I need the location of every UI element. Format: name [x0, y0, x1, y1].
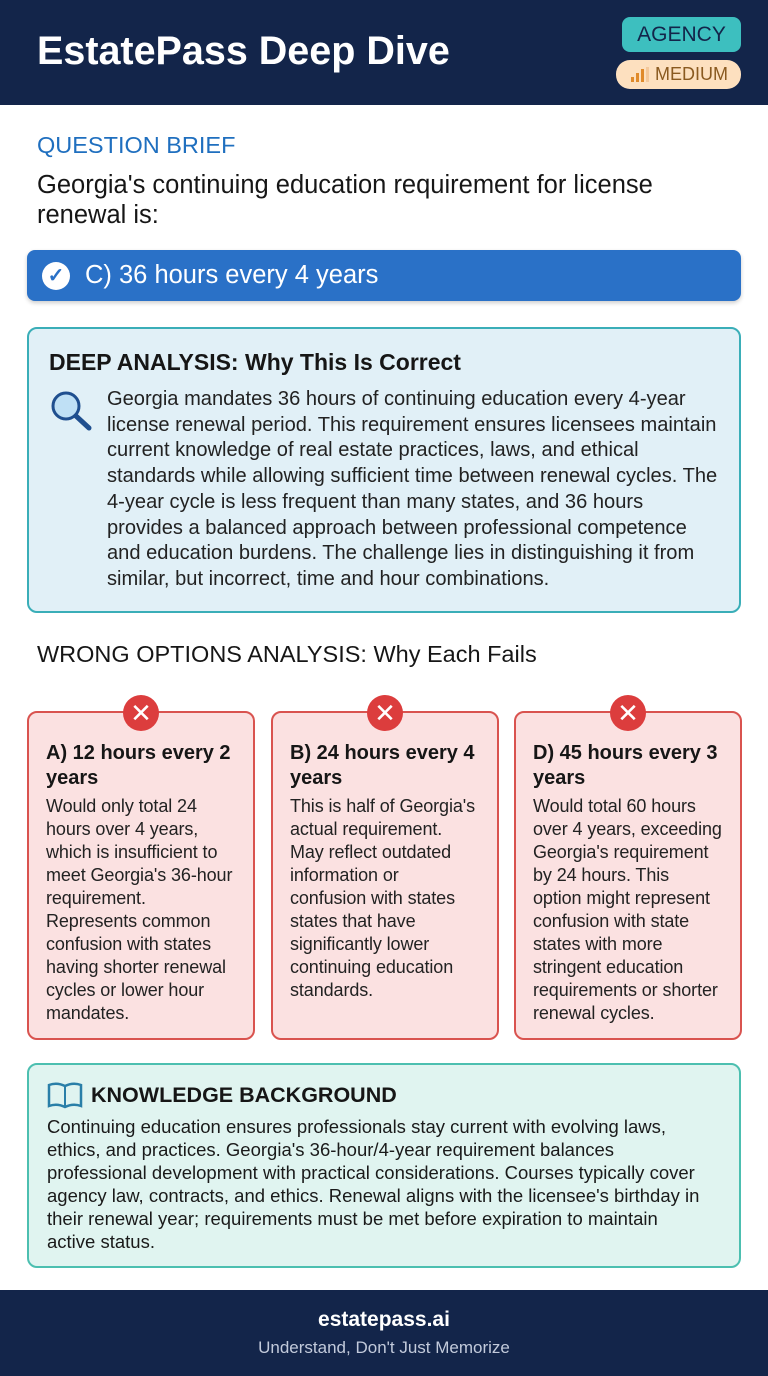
- card: option D: over 4 years, exceeding: [533, 819, 722, 839]
- knowledge text: Continuing education ensures professionals stay current with evolving laws,: [47, 1116, 666, 1137]
- card: option D: states with more: [533, 934, 662, 954]
- card: option A: Would only total 24: [46, 796, 197, 816]
- question text: Georgia's continuing education requirement for license: [37, 171, 653, 199]
- answer bar: [27, 250, 741, 301]
- card: option D: option might represent: [533, 888, 710, 908]
- card: option B: ✕: [374, 698, 396, 728]
- card: option D: D) 45 hours every 3: [533, 742, 718, 764]
- analysis text: current knowledge of real estate practices, laws, and ethical: [107, 439, 639, 461]
- card: option D: years: [533, 767, 585, 789]
- knowledge text: ethics, and practices. Georgia's 36-hour/4-year requirement balances: [47, 1139, 614, 1160]
- icon: book: [48, 1082, 82, 1108]
- card: option D: ✕: [617, 698, 639, 728]
- header: [0, 0, 768, 105]
- card: option A: confusion with states: [46, 934, 211, 954]
- card: option B: states that have: [290, 911, 415, 931]
- card: option A: cycles or lower hour: [46, 980, 204, 1000]
- card: option A: hours over 4 years,: [46, 819, 198, 839]
- card: option A: Represents common: [46, 911, 210, 931]
- badge: agency: [622, 17, 741, 52]
- heading: KNOWLEDGE BACKGROUND: [91, 1083, 397, 1107]
- card: option B: B) 24 hours every 4: [290, 742, 475, 764]
- heading: DEEP ANALYSIS: Why This Is Correct: [49, 349, 461, 375]
- card: option B: [271, 711, 499, 1040]
- card: option A: mandates.: [46, 1003, 129, 1023]
- badge: medium: [616, 60, 741, 89]
- title: EstatePass Deep Dive: [37, 29, 450, 73]
- knowledge text: agency law, contracts, and ethics. Renewal aligns with the licensee's birthday in: [47, 1185, 699, 1206]
- card: option A: A) 12 hours every 2: [46, 742, 231, 764]
- analysis text: Georgia mandates 36 hours of continuing education every 4-year: [107, 388, 686, 410]
- card: option B: confusion with states: [290, 888, 455, 908]
- card: option B: standards.: [290, 980, 373, 1000]
- analysis text: 4-year cycle is less frequent than many states, and 36 hours: [107, 491, 643, 513]
- card: option B: actual requirement.: [290, 819, 442, 839]
- card: option A: requirement.: [46, 888, 146, 908]
- footer: [0, 1290, 768, 1376]
- card: option B: significantly lower: [290, 934, 429, 954]
- footer site: estatepass.ai: [318, 1308, 450, 1331]
- card: option B: continuing education: [290, 957, 453, 977]
- card: option D: [514, 711, 742, 1040]
- icon: check: [42, 262, 70, 290]
- question text: renewal is:: [37, 201, 159, 229]
- answer text: C) 36 hours every 4 years: [85, 261, 378, 289]
- analysis text: similar, but incorrect, time and hour combinations.: [107, 568, 549, 590]
- card: option A: years: [46, 767, 98, 789]
- panel: knowledge background: [27, 1063, 741, 1268]
- card: option A: which is insufficient to: [46, 842, 217, 862]
- icon: magnifier: [52, 392, 92, 430]
- badge: medium: MEDIUM: [655, 64, 728, 84]
- section heading: wrong options: WRONG OPTIONS ANALYSIS: Why Each Fails: [37, 641, 537, 667]
- analysis text: [107, 388, 717, 590]
- card: option D: requirements or shorter: [533, 980, 718, 1000]
- analysis text: and education burdens. The challenge lies in distinguishing it from: [107, 542, 694, 564]
- card: option B: years: [290, 767, 342, 789]
- card: option D: by 24 hours. This: [533, 865, 669, 885]
- card: option B: May reflect outdated: [290, 842, 451, 862]
- knowledge text: active status.: [47, 1231, 155, 1252]
- question text: [37, 171, 653, 229]
- card: option A: ✕: [130, 698, 152, 728]
- card: option A: meet Georgia's 36-hour: [46, 865, 232, 885]
- panel: deep analysis: [27, 327, 741, 613]
- footer tagline: Understand, Don't Just Memorize: [258, 1338, 510, 1357]
- card: option D: stringent education: [533, 957, 683, 977]
- card: option A: having shorter renewal: [46, 957, 226, 977]
- knowledge text: professional development with practical considerations. Courses typically cover: [47, 1162, 695, 1183]
- card: option D: renewal cycles.: [533, 1003, 655, 1023]
- card: option B: This is half of Georgia's: [290, 796, 475, 816]
- knowledge text: [47, 1116, 699, 1252]
- section heading: question brief: QUESTION BRIEF: [37, 132, 235, 158]
- badge: agency: AGENCY: [637, 23, 726, 46]
- card: option D: Would total 60 hours: [533, 796, 696, 816]
- card: option D: confusion with state: [533, 911, 689, 931]
- analysis text: standards while allowing sufficient time between renewal cycles. The: [107, 465, 717, 487]
- analysis text: license renewal period. This requirement ensures licensees maintain: [107, 414, 716, 436]
- card: option A: [27, 711, 255, 1040]
- card: option D: Georgia's requirement: [533, 842, 708, 862]
- knowledge text: their renewal year; requirements must be met before expiration to maintain: [47, 1208, 658, 1229]
- card: option B: information or: [290, 865, 399, 885]
- icon: check: ✓: [48, 265, 64, 287]
- analysis text: provides a balanced approach between professional competence: [107, 517, 687, 539]
